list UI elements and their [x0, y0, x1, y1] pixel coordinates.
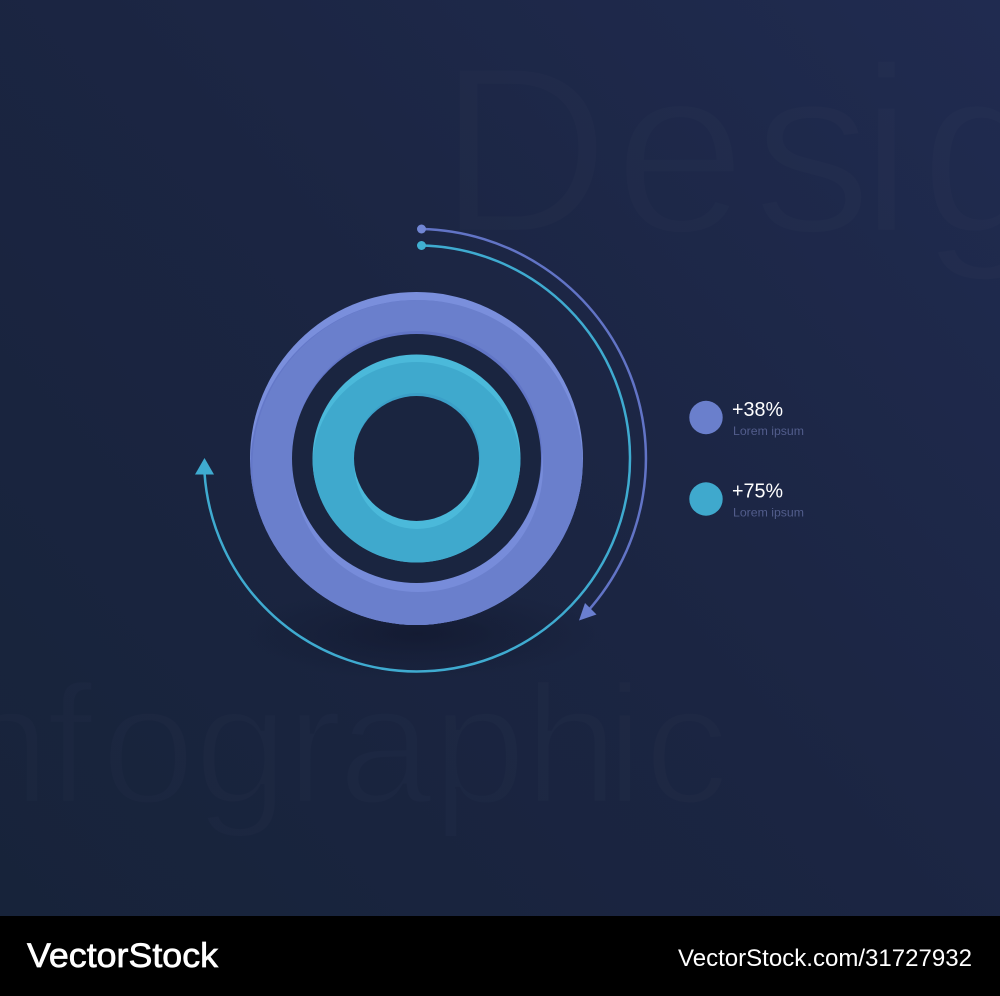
legend item: +75%: Lorem ipsum — [733, 506, 804, 520]
inner ring: +75% — [312, 354, 520, 570]
legend — [689, 399, 804, 520]
outer ring: +38% — [250, 292, 583, 632]
footer image id: VectorStock.com/31727932 — [678, 945, 972, 972]
footer bar — [0, 916, 1000, 996]
legend item: +38%: Lorem ipsum — [733, 424, 804, 438]
legend item: +38% — [689, 399, 804, 438]
arrow: teal arc — [195, 241, 630, 671]
legend item: +38%: +38% — [732, 399, 783, 421]
chart: concentric rings — [250, 292, 583, 632]
legend item: +75%: +75% — [732, 480, 783, 502]
legend item: +75% — [689, 480, 804, 520]
footer logo: VectorStock — [27, 937, 219, 975]
ring drop shadow — [237, 588, 597, 680]
arrow: purple arc — [417, 224, 646, 620]
